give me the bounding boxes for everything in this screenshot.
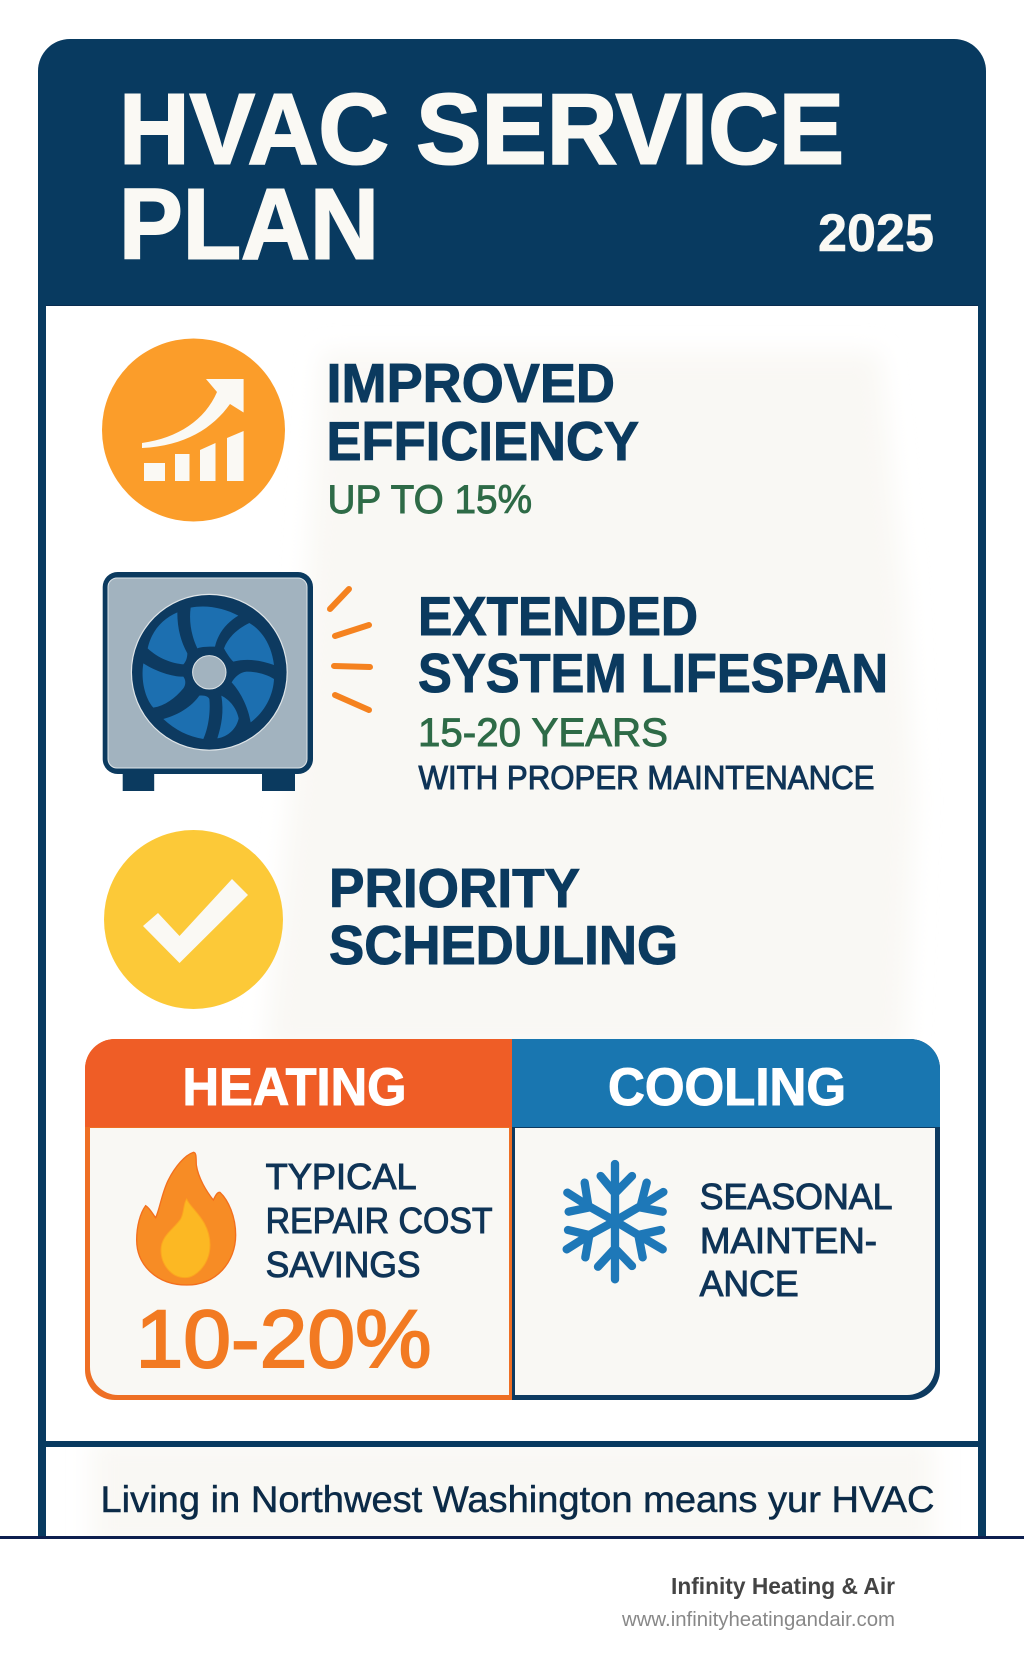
- icon: outdoor HVAC unit: [103, 572, 313, 791]
- text: seasonal maintenance: ANCE: [700, 1263, 799, 1304]
- stat: savings range: 10-20%: [136, 1294, 432, 1385]
- heading line two: SYSTEM LIFESPAN: [418, 642, 888, 704]
- note: WITH PROPER MAINTENANCE: [418, 759, 874, 796]
- header: title: [119, 74, 934, 280]
- icon: orange motion ticks: [330, 589, 370, 710]
- panel: intro text cut off by footer: [100, 1448, 934, 1536]
- benefit: extended lifespan: [103, 572, 888, 796]
- heading: IMPROVED: [326, 352, 615, 414]
- text: seasonal maintenance: [700, 1176, 893, 1304]
- title line one: HVAC SERVICE: [119, 74, 844, 186]
- text: repair cost savings: SAVINGS: [266, 1244, 421, 1285]
- text: repair cost savings: [266, 1156, 493, 1285]
- heading: heating: HEATING: [182, 1058, 406, 1117]
- heading: EXTENDED: [418, 585, 698, 647]
- panel: heating: [85, 1039, 512, 1400]
- stat: 15-20 YEARS: [418, 711, 668, 755]
- footer: [0, 1536, 1024, 1666]
- icon: checkmark: [104, 830, 283, 1009]
- panel: cooling: [512, 1039, 940, 1400]
- icon: flame: [137, 1152, 236, 1285]
- footer: company name: Infinity Heating & Air: [671, 1573, 895, 1599]
- text: seasonal maintenance: SEASONAL: [700, 1176, 893, 1217]
- heading line two: SCHEDULING: [329, 914, 678, 976]
- soft cream backdrop: [265, 352, 915, 1050]
- title line two: PLAN: [119, 168, 379, 280]
- icon: snowflake: [567, 1164, 663, 1279]
- benefit: priority scheduling: [104, 830, 678, 1009]
- year: 2025: [818, 204, 934, 263]
- text: repair cost savings: TYPICAL: [266, 1156, 417, 1197]
- text: repair cost savings: REPAIR COST: [266, 1200, 493, 1241]
- text: seasonal maintenance: MAINTEN-: [700, 1220, 877, 1261]
- icon: growth chart: [102, 338, 285, 522]
- stat: UP TO 15%: [328, 478, 532, 522]
- heading: PRIORITY: [329, 857, 580, 919]
- footer: website: www.infinityheatingandair.com: [621, 1609, 895, 1631]
- panel: intro text cut off by footer: Living in Northwest Washington means yur HVAC: [100, 1479, 934, 1520]
- heading line two: EFFICIENCY: [326, 410, 639, 472]
- heading: cooling: COOLING: [608, 1058, 846, 1117]
- panel: heating and cooling: [85, 1039, 940, 1400]
- benefit: improved efficiency: [102, 338, 639, 522]
